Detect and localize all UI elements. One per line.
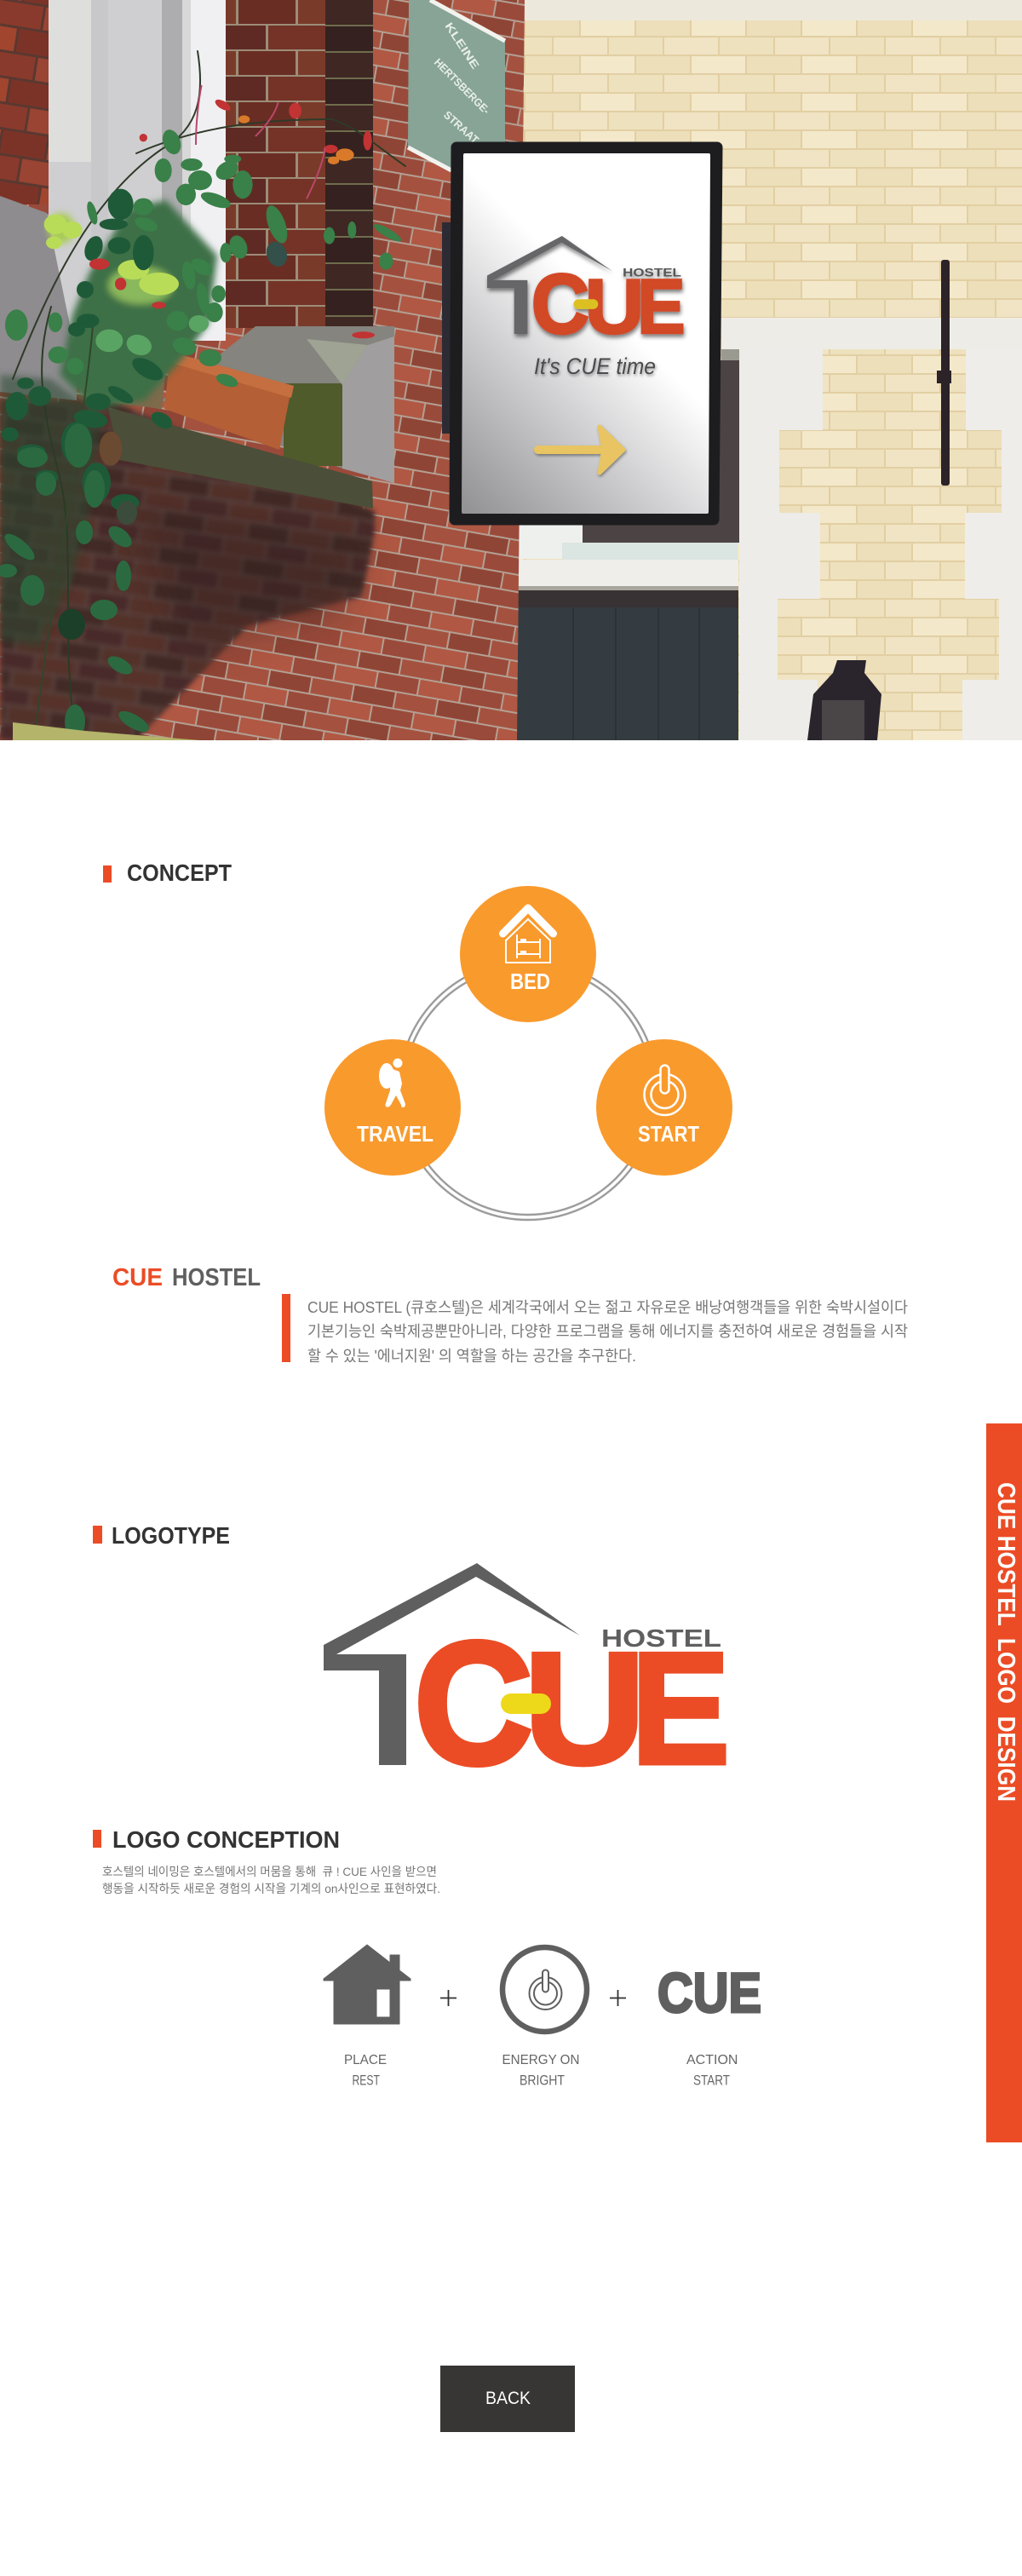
- ground patch: [13, 722, 200, 740]
- street name plate: HERTSBERGE-: [432, 56, 492, 117]
- icon: power circle: [502, 1947, 587, 2032]
- side tab: [986, 1423, 1022, 2142]
- circle: travel: TRAVEL: [357, 1121, 433, 1147]
- rose plant stems: [13, 51, 405, 740]
- icon: cue wordmark: CUE: [657, 1961, 761, 2024]
- sign frame: [455, 147, 717, 520]
- circle: travel: [324, 1039, 461, 1176]
- logo subtitle: HOSTEL: [601, 1625, 721, 1653]
- concept description: 기본기능인 숙박제공뿐만아니라, 다양한 프로그램을 통해 에너지를 충전하여 새로운 경험들을 시작: [307, 1323, 908, 1340]
- sign logo: HOSTEL: [623, 266, 681, 279]
- icon: house: [324, 1945, 411, 2024]
- street name plate: STRAAT: [441, 108, 481, 147]
- back button: [440, 2366, 575, 2432]
- circle: bed: BED: [510, 969, 550, 994]
- concept description: [307, 1299, 908, 1365]
- double ring: [399, 961, 657, 1220]
- logo conception description: 행동을 시작하듯 새로운 경험의 시작을 기계의 on사인으로 표현하였다.: [102, 1882, 440, 1895]
- sign logo: C: [531, 257, 589, 352]
- stone window jamb left: [0, 196, 77, 400]
- label: action start: ACTION: [686, 2053, 738, 2067]
- dark weathered lower bricks: [0, 400, 375, 740]
- logo wordmark: C: [414, 1606, 533, 1801]
- label: action start: START: [693, 2072, 730, 2089]
- circle: bed: [460, 886, 596, 1022]
- lantern: [807, 660, 881, 740]
- label: place rest: PLACE: [344, 2053, 387, 2067]
- back button: BACK: [485, 2389, 531, 2408]
- heading: cue hostel: HOSTEL: [172, 1264, 261, 1291]
- section heading: logotype: LOGOTYPE: [112, 1522, 230, 1549]
- sign logo: [487, 236, 686, 352]
- sign logo: E: [637, 264, 686, 350]
- concept description: CUE HOSTEL (큐호스텔)은 세계각국에서 오는 젊고 자유로운 배낭여행객들을 위한 숙박시설이다: [307, 1299, 908, 1316]
- window and door below sign: [517, 349, 739, 740]
- logo wordmark: U: [524, 1619, 646, 1797]
- rose plant leaves: [2, 85, 403, 511]
- white stone quoins: [721, 318, 1022, 740]
- house roof mark: [324, 1563, 580, 1765]
- heading: cue hostel: CUE: [112, 1264, 163, 1291]
- label: place rest: [344, 2053, 387, 2089]
- label: energy on bright: BRIGHT: [520, 2072, 565, 2089]
- circle: start: START: [638, 1121, 699, 1147]
- sign panel: [463, 155, 709, 512]
- label: energy on bright: [502, 2053, 579, 2089]
- concept diagram: [324, 886, 732, 1220]
- circle: start: [596, 1039, 732, 1176]
- logo wordmark: E: [631, 1619, 730, 1797]
- section heading: concept: CONCEPT: [127, 860, 232, 886]
- sign bracket: [442, 222, 452, 434]
- concept description: 할 수 있는 '에너지원' 의 역할을 하는 공간을 추구한다.: [307, 1348, 636, 1365]
- terracotta planter: [164, 352, 294, 450]
- brick wall base: [0, 0, 525, 740]
- icon: house with bunk bed: [502, 908, 554, 963]
- sign tagline: It's CUE time: [534, 354, 656, 379]
- sign arrow: [538, 427, 623, 473]
- street name plate: [408, 0, 505, 170]
- logo conception description: 호스텔의 네이밍은 호스텔에서의 머뭄을 통해 큐 ! CUE 사인을 받으면: [102, 1865, 437, 1878]
- logo wordmark: [414, 1606, 730, 1801]
- sign logo: U: [585, 264, 644, 350]
- cream brick wall: [520, 0, 1022, 740]
- lower vine leaves: [0, 423, 152, 739]
- iron pipe on wall: [937, 260, 951, 486]
- logo conception description: [102, 1865, 440, 1895]
- icon: backpacker: [379, 1058, 405, 1107]
- street name plate: KLEINE: [442, 20, 482, 72]
- section heading: logo conception: LOGO CONCEPTION: [112, 1826, 340, 1853]
- hero photo: hanging hostel sign on brick building: [0, 0, 1022, 740]
- dense foliage mass: [0, 200, 217, 647]
- heading: cue hostel: [112, 1264, 261, 1291]
- accent bar: [282, 1294, 290, 1362]
- side tab: CUE HOSTEL LOGO DESIGN: [992, 1482, 1019, 1802]
- plus sign: [440, 1990, 456, 2006]
- label: place rest: REST: [353, 2072, 380, 2089]
- main logo: [324, 1563, 730, 1801]
- plus sign: [610, 1990, 626, 2006]
- icon: power button: [644, 1065, 685, 1115]
- wicker basket: [114, 373, 165, 409]
- label: action start: [686, 2053, 738, 2089]
- curtained window: [49, 0, 226, 341]
- stone window ledge and moss: [108, 326, 394, 509]
- yellow switch pill: [501, 1693, 551, 1714]
- label: energy on bright: ENERGY ON: [502, 2053, 579, 2067]
